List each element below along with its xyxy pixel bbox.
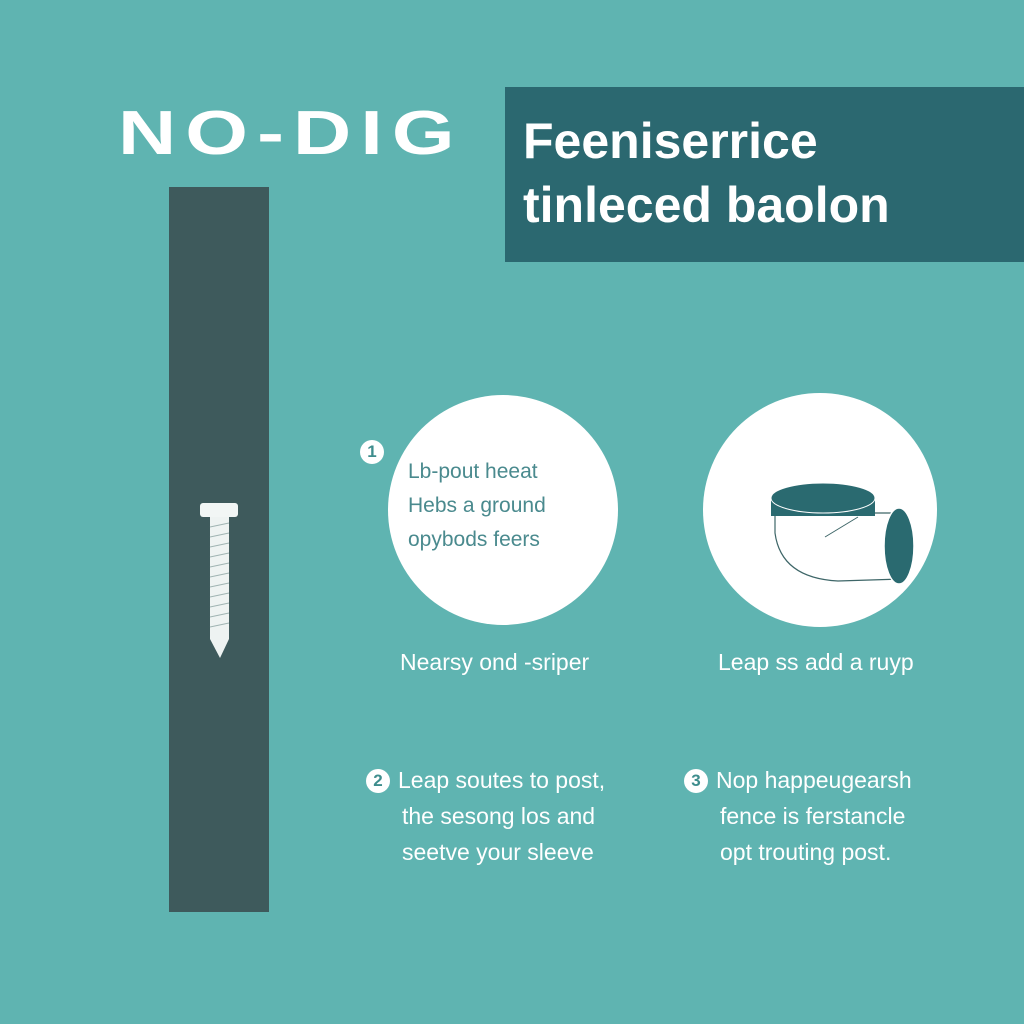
title: NO-DIG	[118, 99, 464, 168]
step 2: Leap soutes to post,	[398, 767, 605, 793]
step 2: 2	[373, 771, 383, 790]
step 3: opt trouting post.	[720, 839, 891, 865]
icon: elbow fitting	[771, 484, 914, 584]
step 3	[684, 767, 912, 865]
icon: screw	[200, 503, 238, 658]
header text: tinleced baolon	[523, 177, 890, 233]
circle 1 text	[408, 460, 546, 551]
circle 2 with fitting icon	[703, 393, 937, 627]
circle 1	[388, 395, 618, 625]
step 2	[366, 767, 605, 865]
post	[169, 187, 269, 912]
header panel	[505, 87, 1024, 262]
header text	[523, 113, 890, 233]
step 2: the sesong los and	[402, 803, 595, 829]
step 3: fence is ferstancle	[720, 803, 905, 829]
step 3: Nop happeugearsh	[716, 767, 912, 793]
step 2: seetve your sleeve	[402, 839, 594, 865]
caption 1: Nearsy ond -sriper	[400, 649, 589, 675]
header text: Feeniserrice	[523, 113, 818, 169]
circle 1 text: opybods feers	[408, 528, 540, 551]
circle 1 text: Hebs a ground	[408, 494, 546, 517]
step 3: 3	[691, 771, 701, 790]
step 1 badge: 1	[367, 442, 377, 461]
caption 2: Leap ss add a ruyp	[718, 649, 914, 675]
circle 1 text: Lb-pout heeat	[408, 460, 538, 483]
